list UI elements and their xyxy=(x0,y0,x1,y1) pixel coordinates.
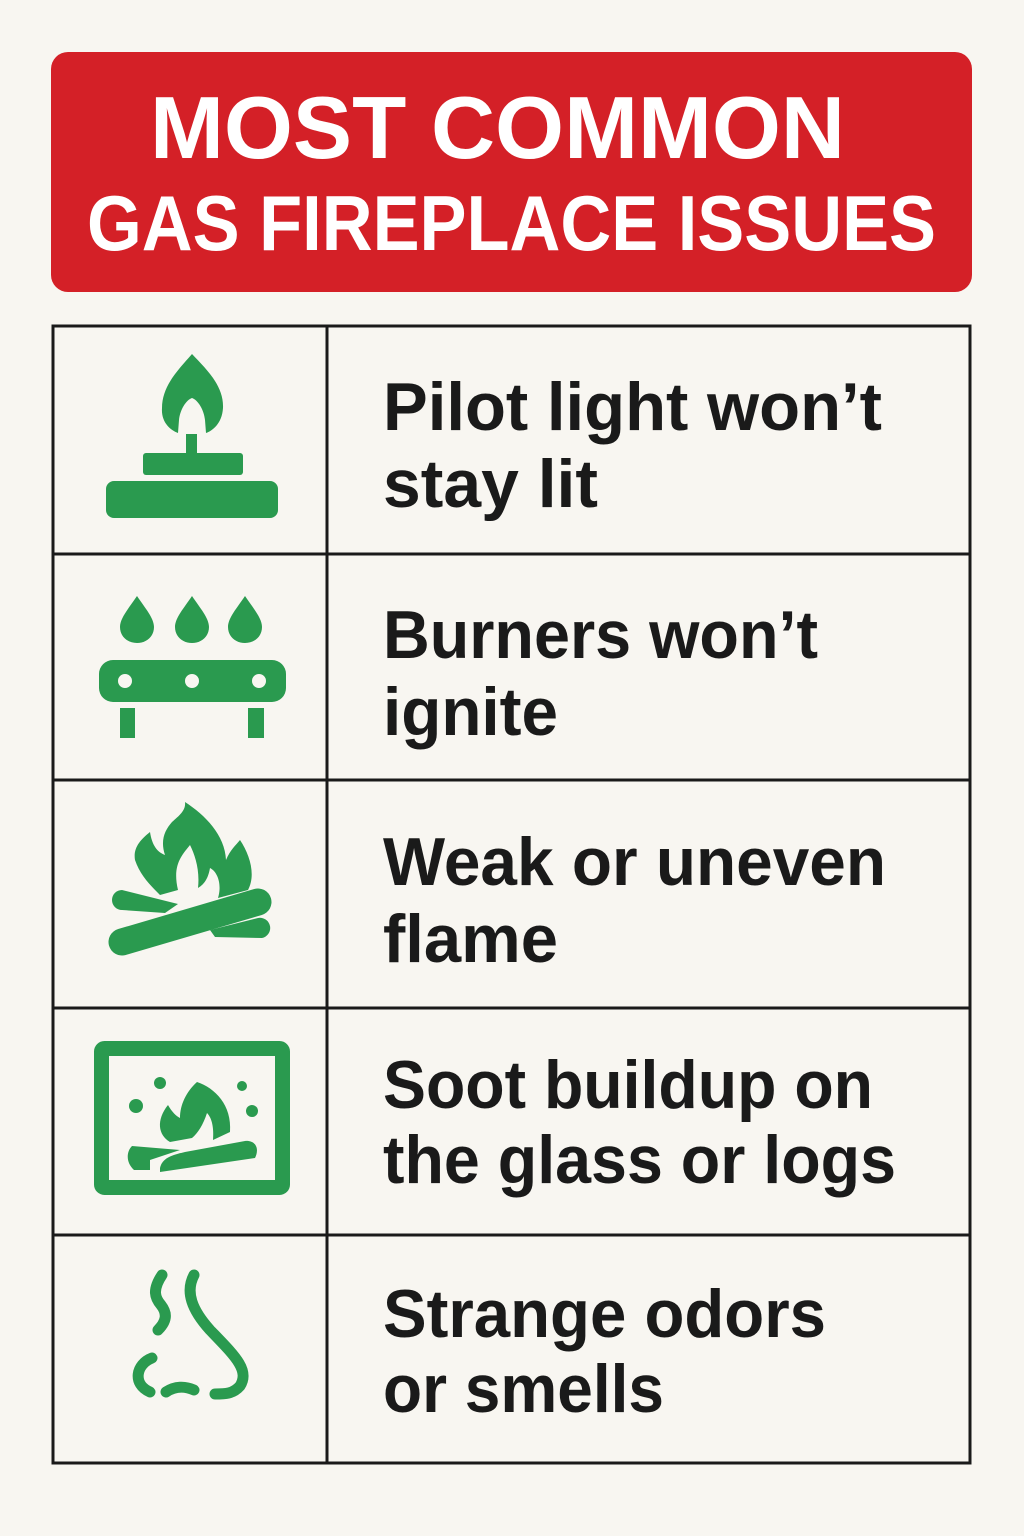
row 5: odors xyxy=(138,1275,826,1427)
text: burners: ignite xyxy=(383,674,558,750)
row 1: pilot light xyxy=(106,354,882,522)
text: pilot light: stay lit xyxy=(383,446,598,522)
text: weak flame xyxy=(383,824,886,977)
text: pilot light: Pilot light won’t xyxy=(383,369,882,445)
icon: sooty fireplace xyxy=(102,1048,282,1188)
text: soot: Soot buildup on xyxy=(383,1047,873,1123)
text: burners xyxy=(383,597,818,750)
icon: burner xyxy=(99,596,286,738)
text: soot: the glass or logs xyxy=(383,1122,896,1198)
text: odors xyxy=(383,1276,826,1427)
text: pilot light xyxy=(383,369,882,522)
title banner xyxy=(51,52,972,292)
text: odors: Strange odors xyxy=(383,1276,826,1352)
icon: pilot flame xyxy=(106,354,278,518)
row 2: burners xyxy=(99,596,818,750)
text: weak flame: flame xyxy=(383,901,558,977)
title banner: MOST COMMON xyxy=(150,78,845,177)
issues table xyxy=(53,326,970,1463)
text: soot xyxy=(383,1047,896,1198)
icon: campfire xyxy=(112,802,270,942)
row 4: soot xyxy=(102,1047,896,1198)
row 3: weak flame xyxy=(112,802,886,977)
text: odors: or smells xyxy=(383,1351,664,1427)
text: weak flame: Weak or uneven xyxy=(383,824,886,900)
text: burners: Burners won’t xyxy=(383,597,818,673)
icon: nose xyxy=(138,1275,243,1394)
title banner: GAS FIREPLACE ISSUES xyxy=(87,179,936,267)
